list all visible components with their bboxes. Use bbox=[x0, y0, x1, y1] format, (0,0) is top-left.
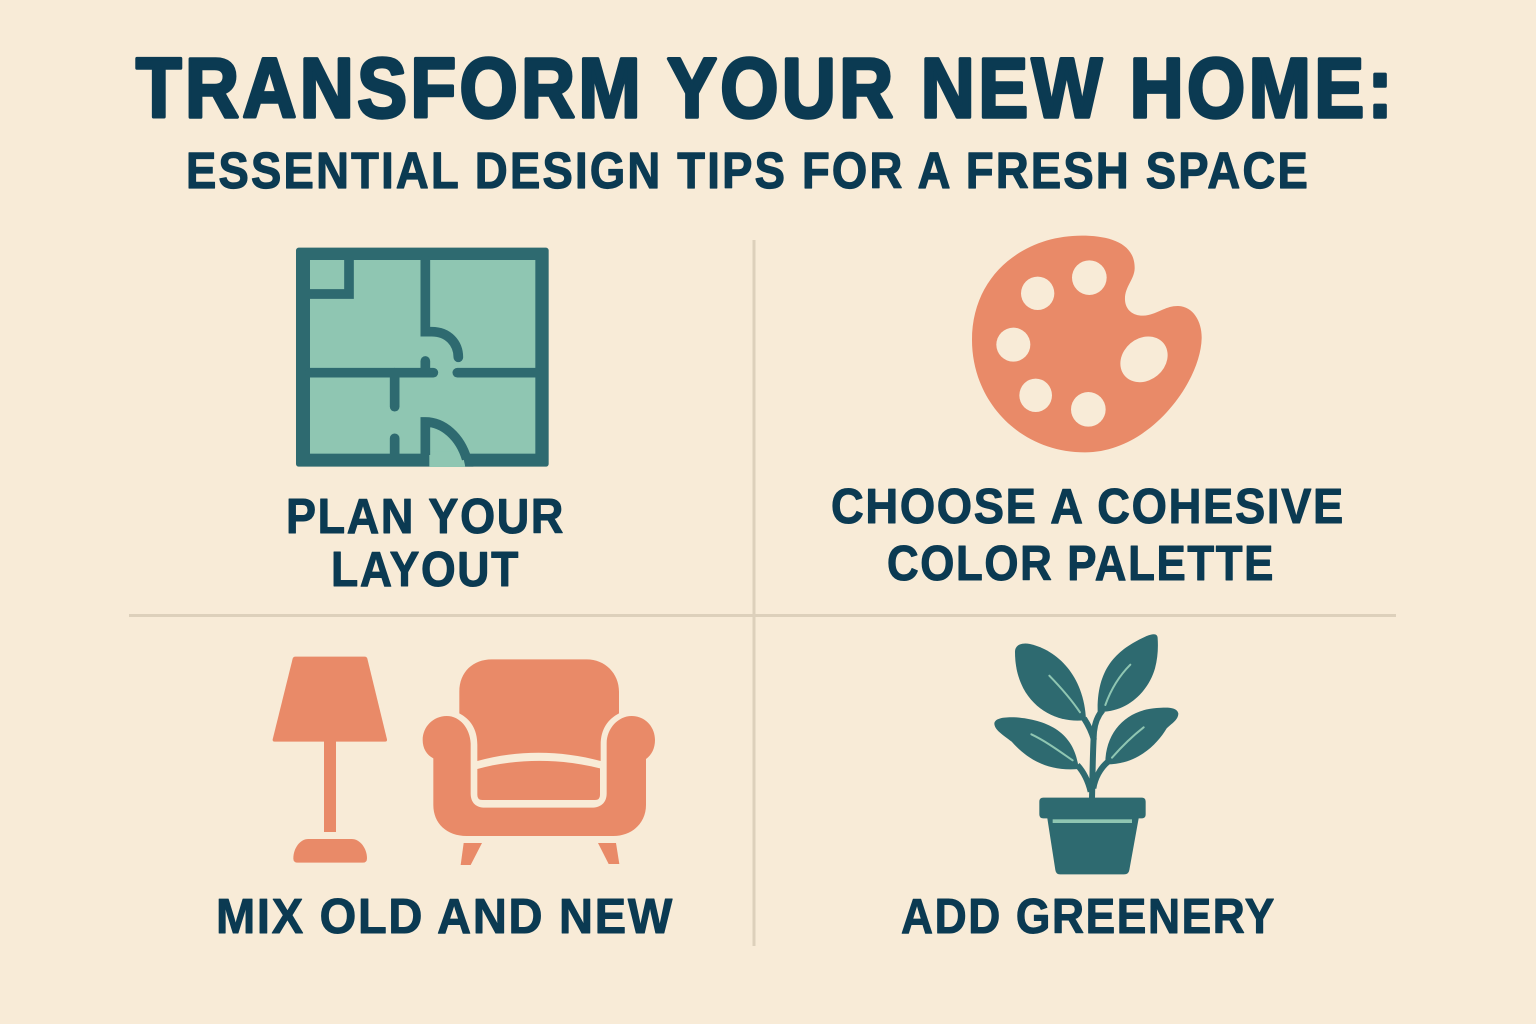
label: choose a cohesive color palette: CHOOSE A COHESIVE bbox=[831, 480, 1345, 534]
icon: floor plan bbox=[296, 248, 549, 467]
label: plan your layout: LAYOUT bbox=[331, 543, 520, 597]
title: TRANSFORM YOUR NEW HOME: bbox=[136, 41, 1396, 135]
panel: add greenery bbox=[901, 634, 1276, 944]
panel: mix old and new bbox=[216, 657, 674, 944]
subtitle: ESSENTIAL DESIGN TIPS FOR A FRESH SPACE bbox=[186, 142, 1310, 199]
icon: painter's palette bbox=[972, 236, 1202, 452]
label: plan your layout bbox=[286, 490, 565, 597]
label: choose a cohesive color palette: COLOR PALETTE bbox=[887, 537, 1275, 591]
icon: armchair bbox=[423, 659, 655, 865]
icon: floor lamp bbox=[273, 657, 387, 863]
label: choose a cohesive color palette bbox=[831, 480, 1345, 591]
label: add greenery: ADD GREENERY bbox=[901, 890, 1276, 944]
label: mix old and new: MIX OLD AND NEW bbox=[216, 890, 674, 944]
panel: color palette bbox=[831, 236, 1345, 591]
panel: plan your layout bbox=[286, 248, 565, 597]
label: plan your layout: PLAN YOUR bbox=[286, 490, 565, 544]
icon: potted plant bbox=[994, 634, 1178, 874]
